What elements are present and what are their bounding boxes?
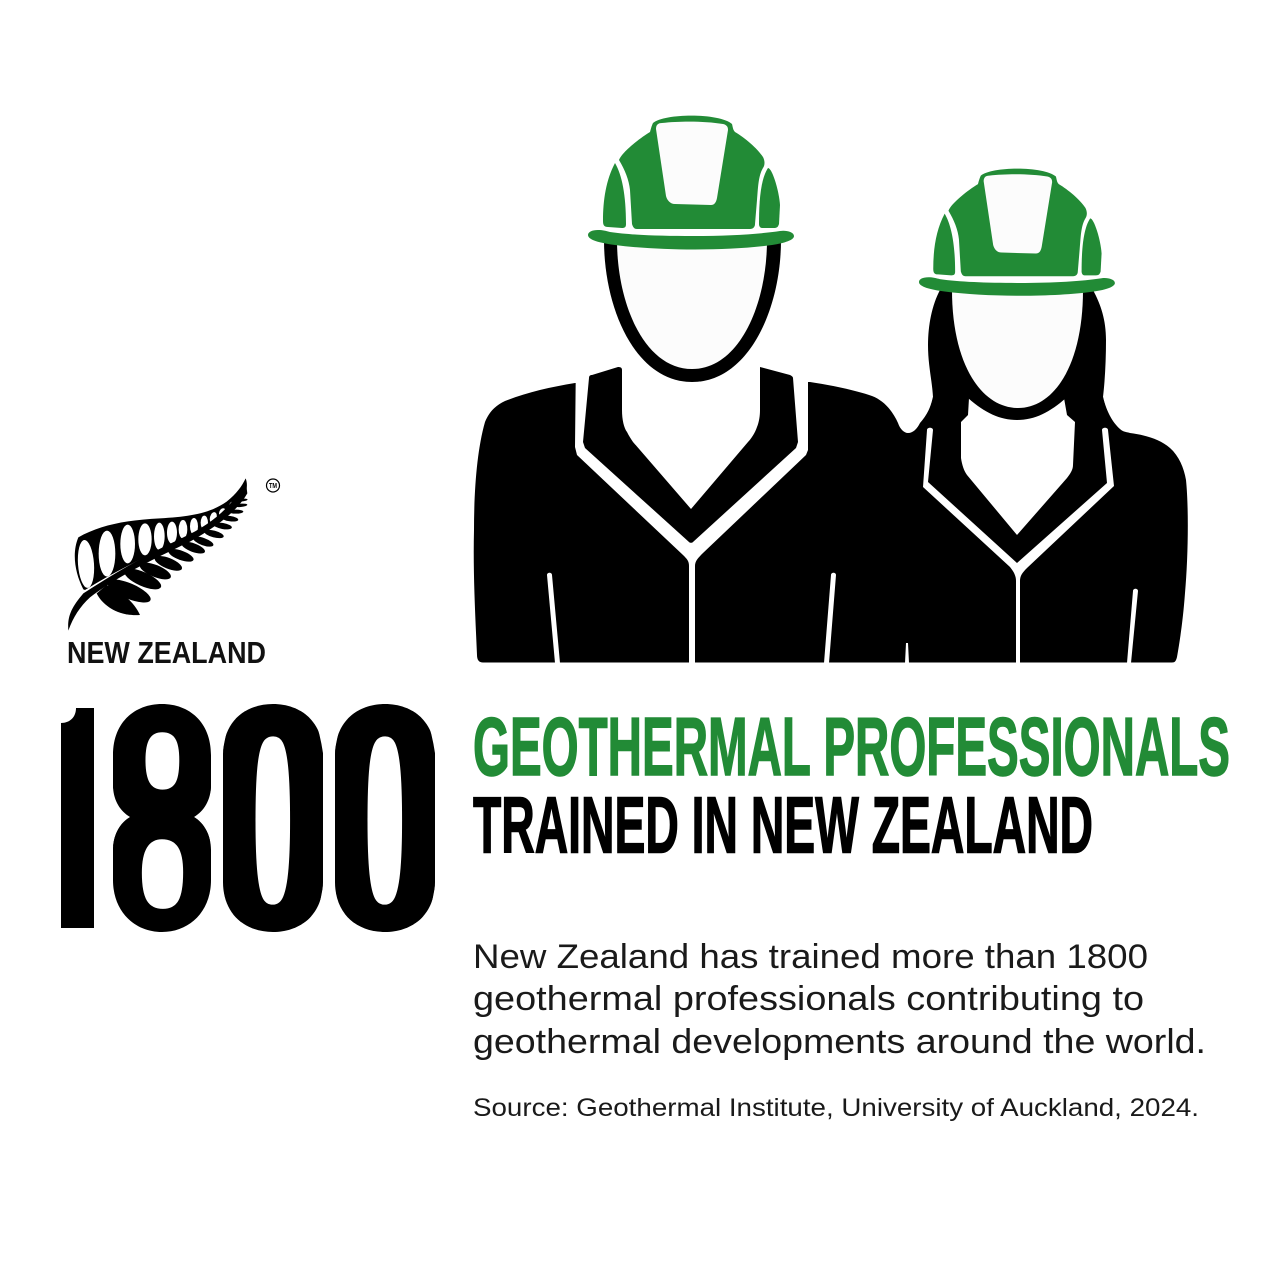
trademark symbol: TM (269, 483, 277, 490)
man: hard hat (588, 116, 794, 249)
man: jacket lapels (583, 367, 798, 543)
woman: neck (961, 398, 1075, 535)
body text: New Zealand has trained more than 1800 (473, 938, 1148, 976)
woman: hard hat (919, 169, 1115, 296)
logo: New Zealand fern mark (67, 478, 280, 670)
body text: geothermal professionals contributing to (473, 980, 1144, 1018)
man: face (617, 240, 767, 369)
big number: 1800: 0 (326, 614, 444, 1027)
big number: 1800 (61, 704, 435, 932)
man: face outline (604, 240, 781, 382)
body text (473, 938, 1206, 1061)
woman: collar line (923, 428, 1114, 663)
illustration: male and female geothermal professionals (474, 116, 1188, 663)
big number: 1800: 1 (4, 614, 139, 1027)
source line: Source: Geothermal Institute, University of Auckland, 2024. (473, 1094, 1199, 1122)
man: collar gap and neck (575, 380, 808, 663)
trademark symbol (266, 479, 280, 492)
infographic canvas (61, 116, 1229, 1121)
logo wordmark: NEW ZEALAND (67, 635, 266, 670)
man: sleeve seams (547, 573, 909, 663)
icon: silver fern (68, 478, 248, 631)
jackets silhouette (474, 382, 1188, 662)
body text: geothermal developments around the world. (473, 1023, 1206, 1061)
big number: 1800: 0 (214, 614, 332, 1027)
woman: hair (917, 290, 1123, 440)
woman: face (952, 290, 1083, 408)
big number: 1800: 8 (96, 614, 229, 1027)
woman: sleeve seam (1127, 589, 1138, 663)
woman: chin outline (968, 380, 1066, 420)
